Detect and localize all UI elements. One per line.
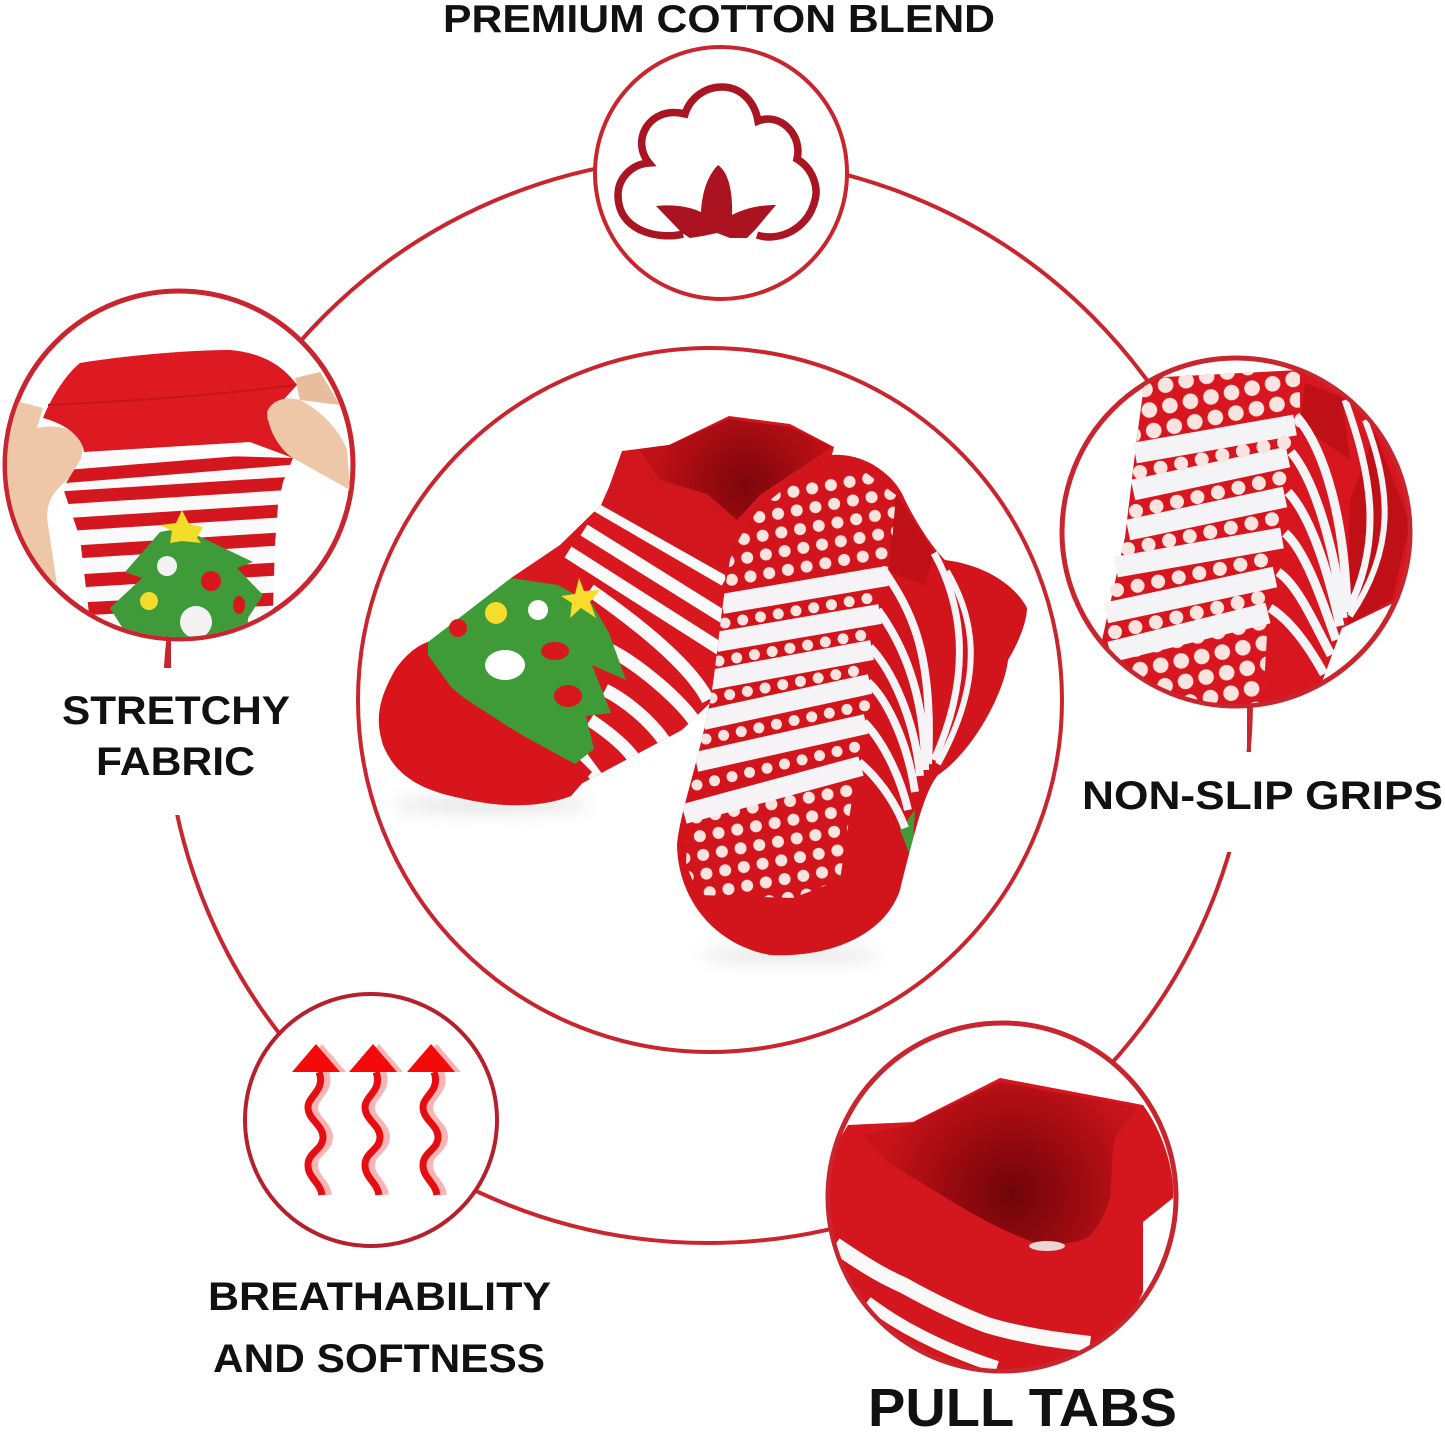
green edge [900, 810, 915, 854]
cuff interior [863, 1082, 1137, 1244]
icon: cotton boll [618, 87, 816, 238]
tree [428, 578, 626, 764]
panel: pull tabs photo circle [815, 1023, 1176, 1400]
label: breathability and softness: BREATHABILITY [208, 1275, 551, 1319]
sock cuff [43, 350, 297, 458]
large connecting ring [165, 157, 1251, 1243]
back tab [1348, 433, 1410, 625]
white stripes [835, 1245, 1090, 1344]
right sock sole [677, 455, 1027, 955]
panel: breathability icon circle [245, 994, 497, 1246]
top grip dots [726, 472, 896, 586]
star [160, 510, 203, 543]
sock body [70, 460, 273, 637]
label: breathability and softness: AND SOFTNESS [213, 1337, 545, 1381]
stripes [596, 505, 725, 580]
left sock [379, 416, 834, 805]
star [561, 578, 600, 618]
right finger [295, 372, 340, 405]
icon: heat arrows shadow [298, 1044, 461, 1195]
connector: grips [1247, 706, 1251, 752]
sock body [428, 505, 732, 785]
label: non-slip grips: NON-SLIP GRIPS [1082, 774, 1443, 818]
sock opening [639, 419, 832, 520]
icon: heat arrows [292, 1044, 455, 1195]
heel shade [888, 495, 934, 585]
ornaments [485, 602, 507, 624]
inner lining spot [1029, 1241, 1065, 1251]
right thumb [267, 398, 350, 490]
connector: stretchy [167, 640, 171, 668]
grip dot rows [697, 596, 882, 785]
heel panel [1300, 383, 1350, 460]
grip dot rows [1115, 441, 1292, 632]
panel: central socks circle [358, 348, 1062, 1052]
white bands [684, 576, 887, 814]
white bands [1106, 425, 1295, 652]
label: stretchy fabric: FABRIC [96, 740, 255, 784]
label: stretchy fabric [62, 689, 290, 784]
panel: stretchy fabric photo circle [0, 291, 353, 640]
label: breathability and softness [208, 1275, 551, 1381]
sock cuff back [601, 416, 834, 600]
sole [1102, 370, 1420, 720]
tree [110, 528, 263, 640]
sock stripes [60, 458, 295, 610]
cuff [830, 1078, 1174, 1369]
top grip dots [1137, 371, 1300, 442]
side stripes [859, 553, 971, 828]
bottom grip dots [1115, 624, 1267, 704]
label: stretchy fabric: STRETCHY [62, 689, 290, 733]
panel: cotton icon circle [595, 47, 847, 299]
sock shadows [390, 797, 880, 962]
left hand [7, 402, 82, 586]
toe [379, 642, 592, 805]
side stripes [1270, 400, 1385, 674]
heel grip dots [686, 784, 852, 898]
panel: non-slip grips photo circle [1062, 358, 1420, 720]
